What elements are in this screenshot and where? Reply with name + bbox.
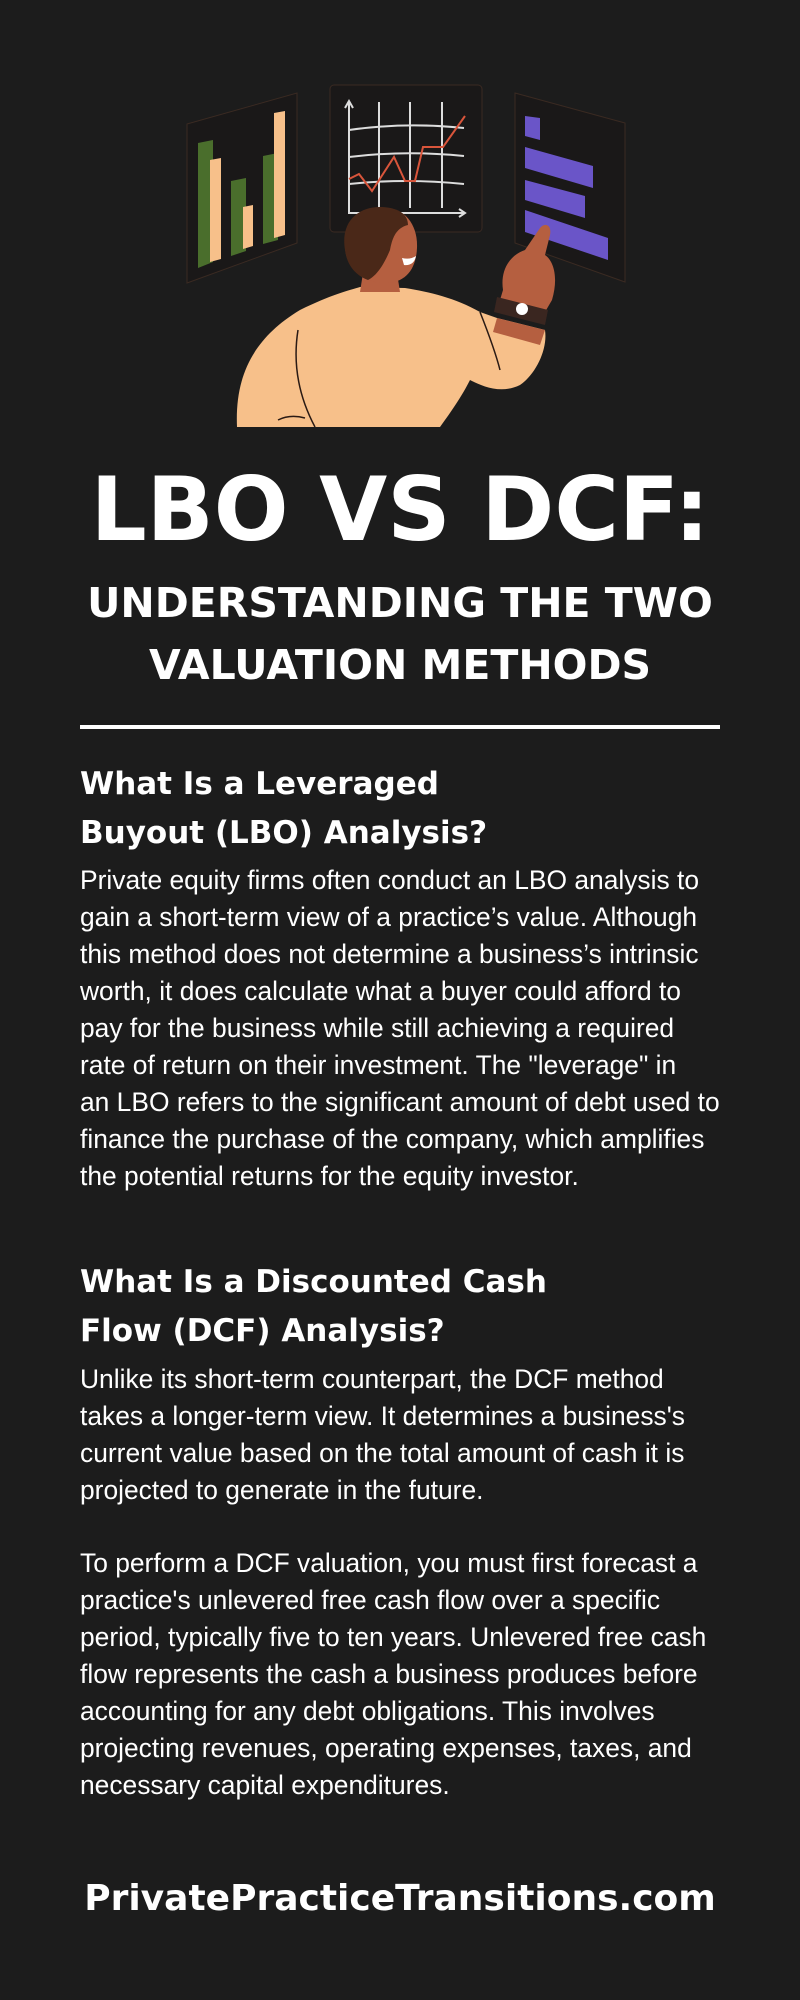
text block: DCF 2: To perform a DCF valuation, you must first forecast a	[80, 1548, 697, 1578]
footer url: PrivatePracticeTransitions.com	[84, 1878, 716, 1919]
text block: DCF 2	[80, 1548, 706, 1800]
heading: LBO	[80, 766, 487, 851]
text block: DCF 1: projected to generate in the future.	[80, 1475, 483, 1505]
heading: DCF	[80, 1264, 547, 1349]
text block: LBO: worth, it does calculate what a buyer could afford to	[80, 976, 681, 1006]
text block: DCF 2: flow represents the cash a business produces before	[80, 1659, 698, 1689]
text block: DCF 1: Unlike its short-term counterpart, the DCF method	[80, 1364, 664, 1394]
text block: LBO: gain a short-term view of a practice’s value. Although	[80, 902, 697, 932]
text block: DCF 2: practice's unlevered free cash flow over a specific	[80, 1585, 660, 1615]
text block: LBO: Private equity firms often conduct an LBO analysis to	[80, 865, 699, 895]
subtitle	[87, 579, 713, 689]
subtitle: VALUATION METHODS	[149, 641, 651, 689]
text block: DCF 2: necessary capital expenditures.	[80, 1770, 450, 1800]
icon: horizontal bars panel	[515, 93, 625, 282]
text block: LBO: rate of return on their investment. The "leverage" in	[80, 1050, 676, 1080]
icon: bar chart panel	[187, 93, 297, 283]
text block: LBO	[80, 865, 720, 1191]
heading: LBO: Buyout (LBO) Analysis?	[80, 815, 487, 851]
text block: DCF 1	[80, 1364, 685, 1505]
text block: LBO: the potential returns for the equity investor.	[80, 1161, 579, 1191]
text block: LBO: this method does not determine a business’s intrinsic	[80, 939, 699, 969]
subtitle: UNDERSTANDING THE TWO	[87, 579, 713, 627]
text block: LBO: an LBO refers to the significant amount of debt used to	[80, 1087, 720, 1117]
icon: person	[237, 207, 555, 427]
text block: DCF 1: takes a longer-term view. It determines a business's	[80, 1401, 685, 1431]
illustration: analyst with charts	[186, 84, 626, 427]
text block: DCF 2: accounting for any debt obligations. This involves	[80, 1696, 655, 1726]
heading: DCF: What Is a Discounted Cash	[80, 1264, 547, 1300]
title: LBO VS DCF:	[91, 458, 709, 561]
text block: LBO: pay for the business while still achieving a required	[80, 1013, 674, 1043]
icon: line chart panel	[330, 85, 482, 232]
text block: DCF 2: period, typically five to ten years. Unlevered free cash	[80, 1622, 706, 1652]
text block: DCF 1: current value based on the total amount of cash it is	[80, 1438, 684, 1468]
text block: DCF 2: projecting revenues, operating expenses, taxes, and	[80, 1733, 692, 1763]
text block: LBO: finance the purchase of the company, which amplifies	[80, 1124, 704, 1154]
heading: DCF: Flow (DCF) Analysis?	[80, 1313, 445, 1349]
heading: LBO: What Is a Leveraged	[80, 766, 439, 802]
